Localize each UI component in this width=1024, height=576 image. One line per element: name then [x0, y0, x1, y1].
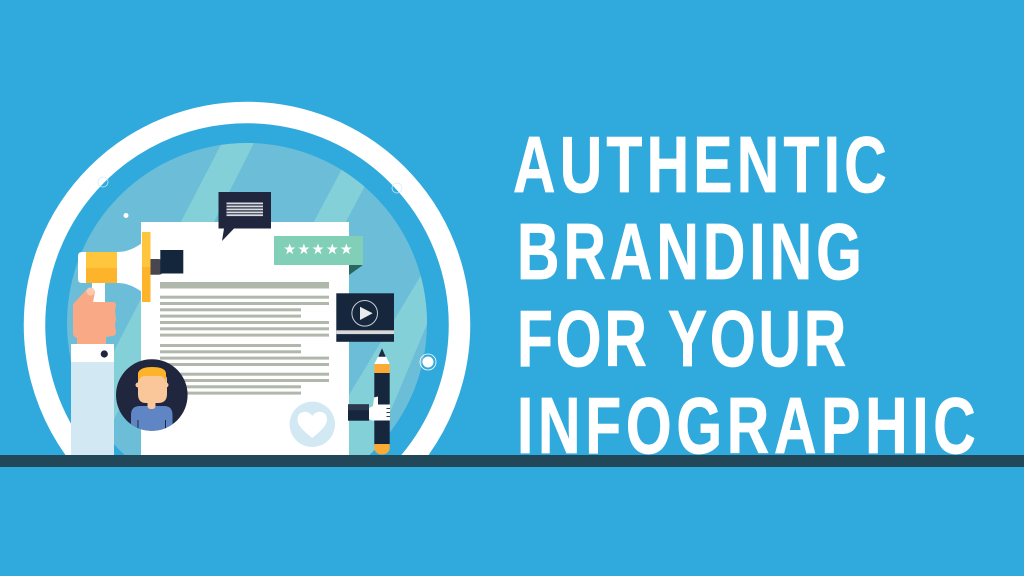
- document text lines: [160, 296, 329, 395]
- avatar hair: [138, 367, 166, 382]
- backdrop disc with diagonal stripes: [67, 143, 427, 455]
- icon: heart badge: [290, 402, 335, 447]
- title: BRANDING: [517, 207, 862, 296]
- ribbon: five star rating: [274, 236, 363, 275]
- hand gripping pencil: [348, 396, 390, 421]
- icon: video player: [336, 293, 394, 342]
- decorative sparkle dots: [98, 177, 436, 370]
- sleeve: [71, 362, 114, 455]
- white ring: [24, 102, 470, 455]
- avatar body: [131, 406, 172, 432]
- megaphone handle: [92, 283, 105, 305]
- icon: speech bubble: [218, 192, 271, 241]
- title: INFOGRAPHIC: [517, 381, 976, 470]
- arm holding megaphone: [71, 288, 116, 455]
- avatar badge: [116, 359, 188, 432]
- avatar head: [138, 376, 167, 403]
- document panel: [141, 222, 349, 455]
- hand: [73, 288, 116, 344]
- ground bar: [0, 455, 1024, 467]
- title: AUTHENTIC: [513, 120, 887, 209]
- cuff: [71, 344, 114, 362]
- document heading bar: [160, 282, 329, 288]
- icon: megaphone: [78, 232, 183, 305]
- title: FOR YOUR: [517, 294, 846, 383]
- title: [513, 120, 976, 470]
- icon: pencil held by hand: [348, 348, 390, 455]
